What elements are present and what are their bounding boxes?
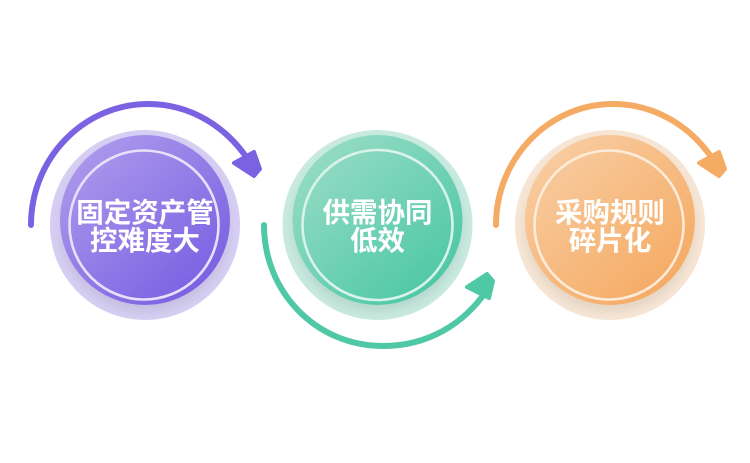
label: supply demand: 供需协同: [322, 197, 432, 228]
arrow: orange: [496, 104, 725, 225]
purple inner ring: [70, 150, 218, 300]
label: supply demand: 低效: [350, 225, 405, 256]
orange halo: [515, 130, 705, 320]
green inner ring: [302, 150, 452, 300]
green halo: [282, 130, 472, 320]
purple disc: [60, 135, 230, 305]
label: fixed assets: 控难度大: [90, 225, 200, 256]
label: procurement: 采购规则: [555, 197, 665, 228]
green disc: [292, 135, 462, 305]
panel: procurement circle: [515, 130, 705, 320]
label: procurement: 碎片化: [569, 225, 651, 256]
arrow: purple: [31, 104, 260, 225]
panel: fixed assets circle: [50, 130, 240, 320]
orange inner ring: [534, 150, 684, 300]
label: fixed assets: 固定资产管: [76, 197, 214, 228]
arrow: green: [264, 225, 493, 346]
orange disc: [525, 135, 695, 305]
panel: supply demand circle: [282, 130, 472, 320]
purple halo: [50, 130, 240, 320]
